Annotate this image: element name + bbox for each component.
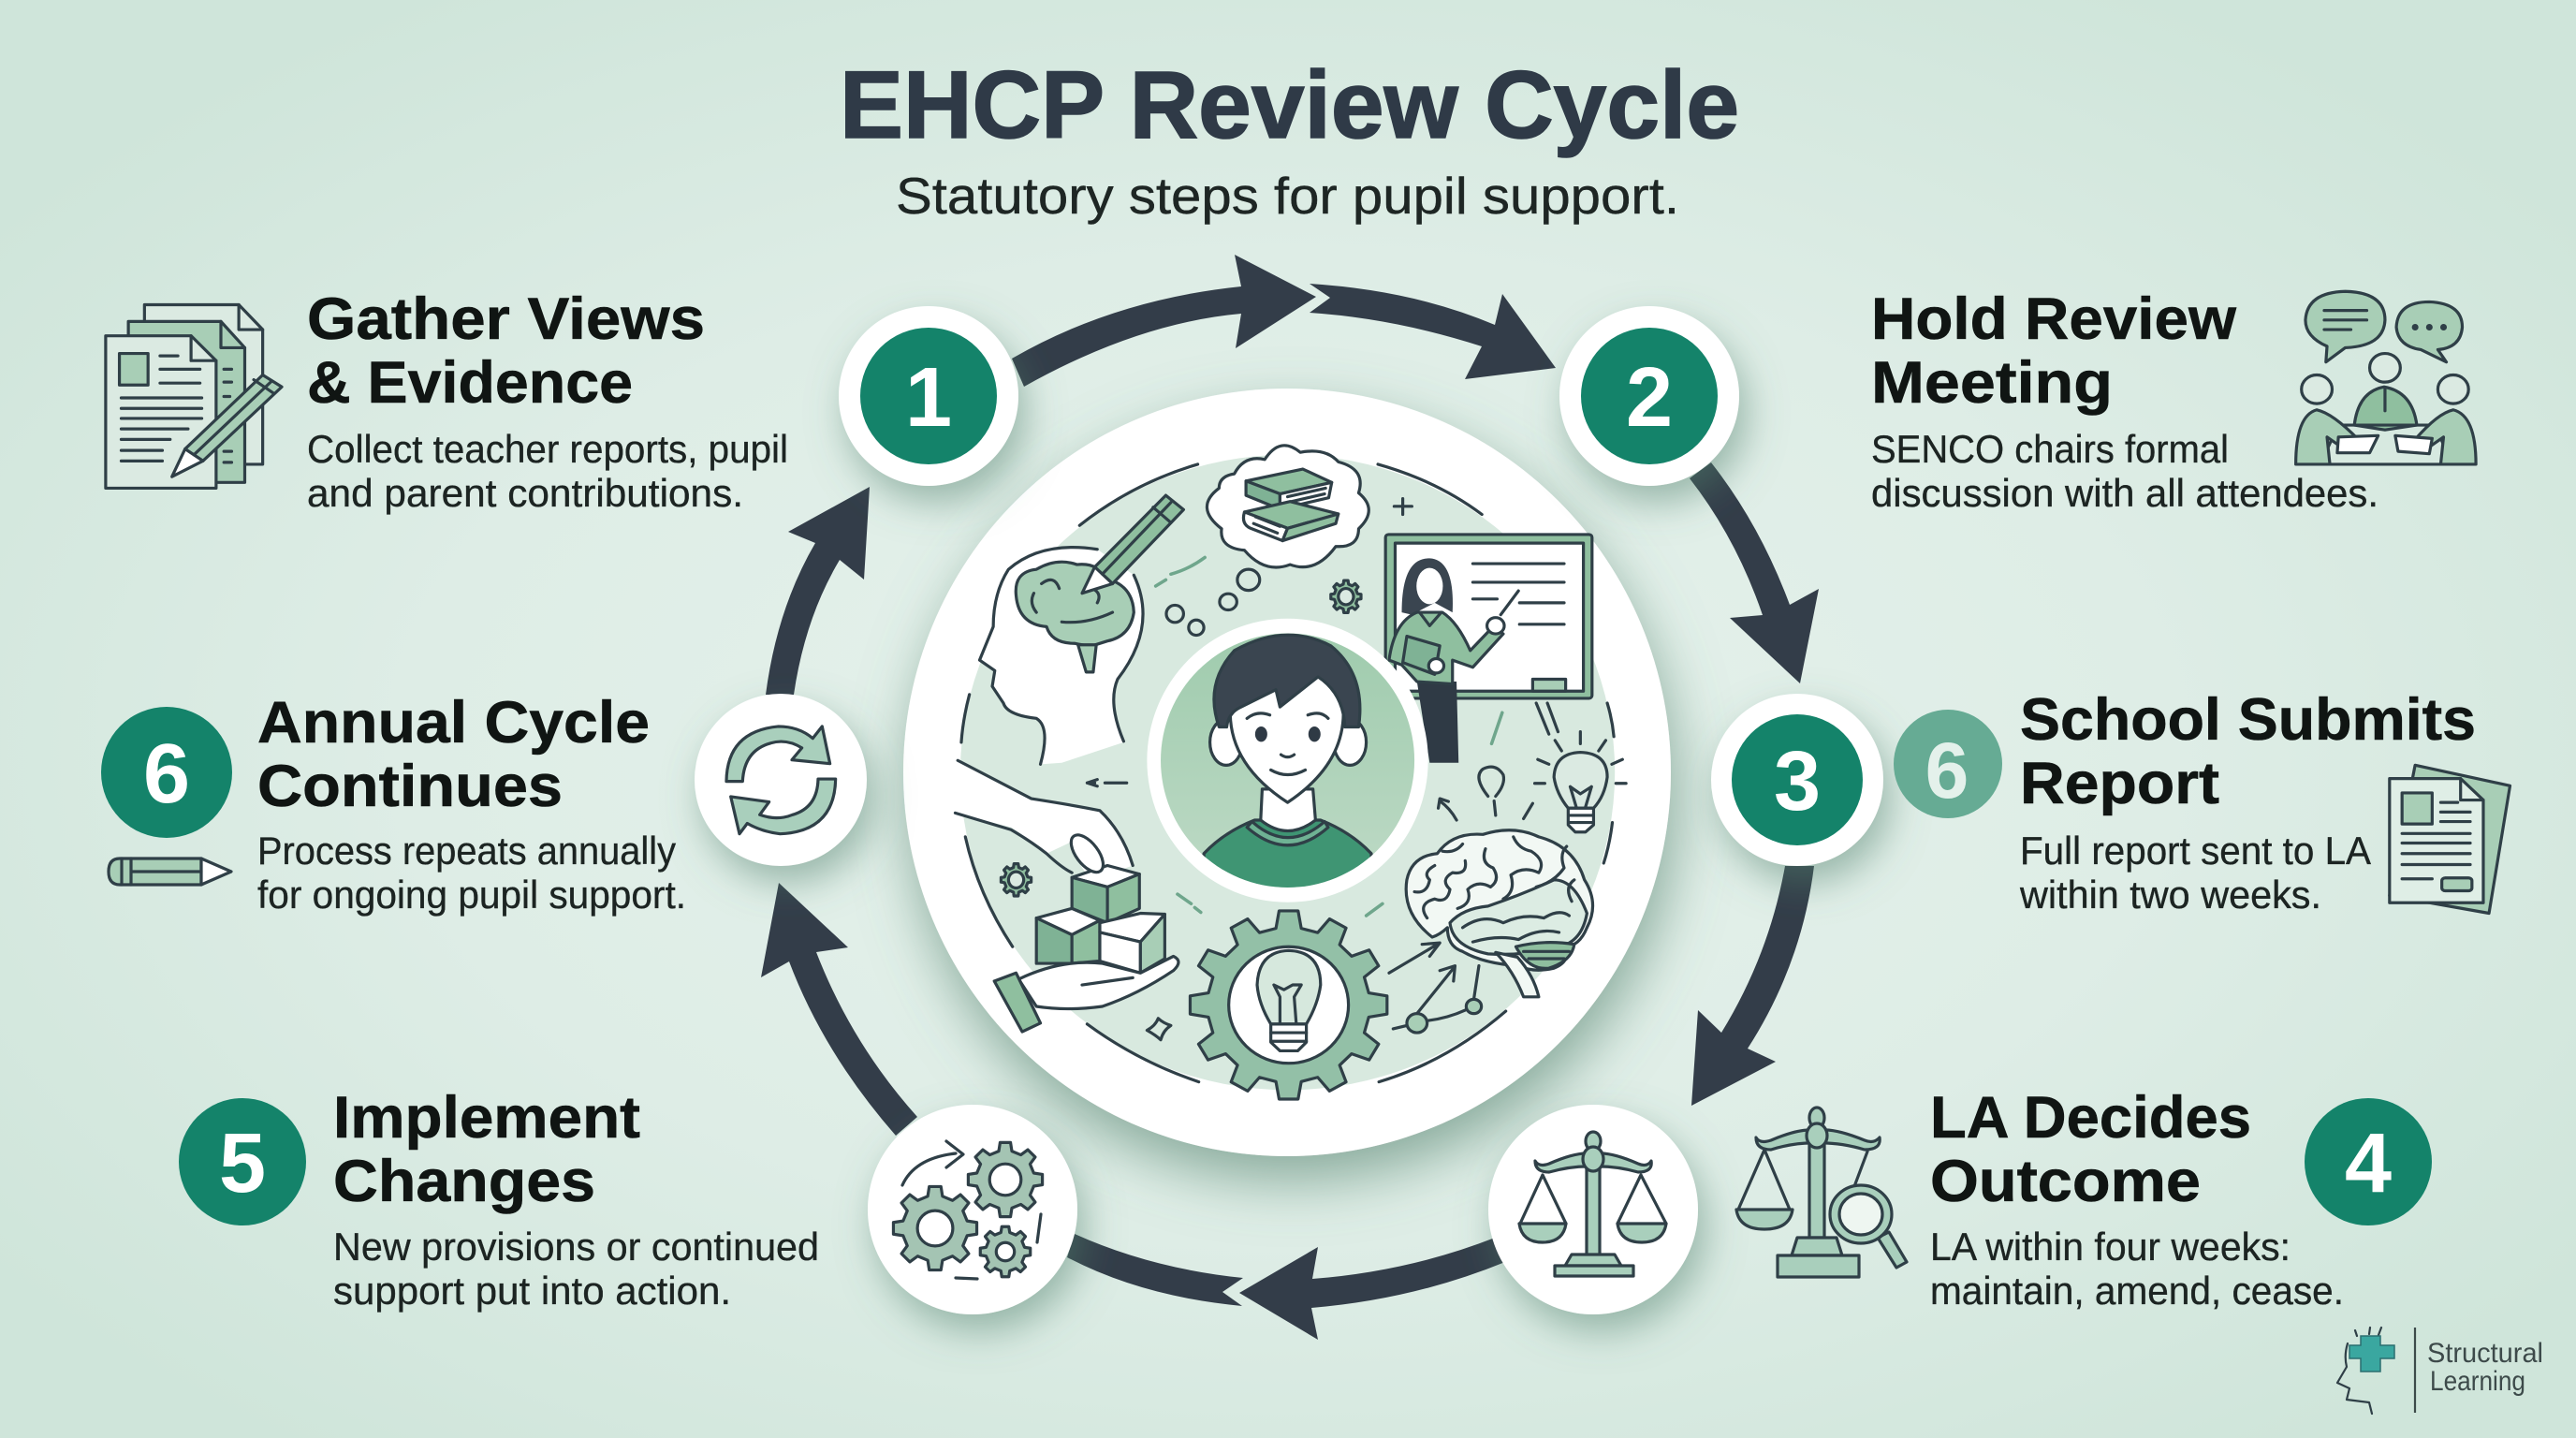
text block: hold review meeting: SENCO chairs formal <box>1871 427 2229 471</box>
node: three gears <box>868 1105 1077 1314</box>
node: refresh icon <box>695 694 867 866</box>
step 3 node <box>1711 694 1883 866</box>
text block: school submits report: School Submits <box>2020 687 2476 753</box>
anatomical brain <box>1406 830 1593 997</box>
central illustration panel <box>903 389 1671 1156</box>
badge: 6 <box>101 707 232 838</box>
text block: gather views and evidence: Gather Views <box>307 286 705 352</box>
hand placing block <box>955 760 1133 880</box>
arrow: step 6 to step 1 <box>766 487 870 695</box>
icon: report <box>2390 765 2510 914</box>
logo divider and wordmark: Structural <box>2427 1338 2543 1369</box>
logo divider and wordmark <box>2415 1328 2543 1413</box>
text block: hold review meeting: Hold Review <box>1871 286 2237 352</box>
thought bubbles <box>1166 569 1260 636</box>
arrow: step 1 to midpoint top <box>1012 255 1316 387</box>
logo divider and wordmark: Learning <box>2430 1366 2525 1397</box>
text block: school submits report: Full report sent to LA <box>2020 829 2371 873</box>
text block: LA decides outcome <box>1930 1085 2344 1313</box>
plus mark <box>1394 499 1412 514</box>
step 3 node: 3 <box>1774 735 1821 829</box>
step 1 node <box>839 306 1018 486</box>
arrow: step 3 to step 4 <box>1691 866 1814 1106</box>
text block: LA decides outcome: Outcome <box>1930 1149 2201 1214</box>
step 2 node: 2 <box>1626 351 1673 445</box>
step 1 node: 1 <box>905 351 952 445</box>
text block: school submits report: Report <box>2020 751 2219 816</box>
illustration scene <box>955 446 1626 1099</box>
step 2 node <box>1559 306 1739 486</box>
title: EHCP Review Cycle <box>840 51 1739 158</box>
head with brain and pencil <box>979 495 1183 764</box>
badge: 4: 4 <box>2345 1117 2392 1211</box>
inner tinted disc <box>960 455 1615 1090</box>
text block: implement changes <box>333 1085 819 1313</box>
text block: annual cycle continues: Annual Cycle <box>257 690 650 756</box>
badge: 5 <box>179 1098 306 1225</box>
teacher at whiteboard <box>1385 535 1592 763</box>
text block: hold review meeting: Meeting <box>1871 350 2113 416</box>
icon: scales and magnifier <box>1736 1108 1907 1277</box>
thought cloud with books <box>1207 446 1368 567</box>
dashed ring segments <box>961 464 1614 1082</box>
icon: meeting <box>2296 291 2476 464</box>
badge: faded 6 <box>1894 710 2002 818</box>
gear with light bulb <box>1190 911 1387 1099</box>
text block: LA decides outcome: LA Decides <box>1930 1085 2251 1151</box>
icon: small pencil <box>109 858 231 885</box>
badge: 6: 6 <box>143 727 190 821</box>
text block: annual cycle continues: Continues <box>257 754 563 819</box>
badge: faded 6: 6 <box>1925 726 1969 814</box>
logo head outline <box>2337 1328 2381 1414</box>
logo: Structural Learning <box>2337 1328 2543 1414</box>
text block: gather views and evidence: Collect teacher reports, pupil <box>307 427 788 471</box>
text block: hold review meeting <box>1871 286 2378 515</box>
arrow: step 4 to bottom midpoint <box>1239 1238 1505 1340</box>
idea bulb <box>1439 732 1626 832</box>
pupil portrait <box>1147 619 1428 902</box>
arrow: step 2 to step 3 <box>1690 462 1819 683</box>
text block: school submits report <box>2019 687 2476 917</box>
text block: annual cycle continues <box>257 690 686 917</box>
white disc <box>903 389 1671 1156</box>
small gear left <box>1001 864 1032 896</box>
network nodes <box>1389 943 1482 1033</box>
text block: LA decides outcome: maintain, amend, cease. <box>1930 1269 2344 1313</box>
node: balance scales <box>1488 1105 1698 1314</box>
text block: implement changes: New provisions or continued <box>333 1225 819 1269</box>
cycle arrows <box>761 255 1819 1340</box>
sparkle and small arrow <box>1087 780 1171 1040</box>
text block: annual cycle continues: for ongoing pupil support. <box>257 873 686 917</box>
stacked blocks <box>1036 829 1164 973</box>
small gear top <box>1331 580 1361 612</box>
badge: 5: 5 <box>219 1117 266 1211</box>
green dashes <box>1156 557 1502 916</box>
text block: implement changes: Implement <box>333 1085 640 1151</box>
text block: gather views and evidence: & Evidence <box>307 350 633 416</box>
text block: annual cycle continues: Process repeats annually <box>257 829 676 873</box>
arrow: bottom midpoint to step 5 <box>1067 1234 1243 1306</box>
icon: documents and pencil <box>106 305 282 488</box>
text block: school submits report: within two weeks. <box>2019 873 2321 917</box>
arrow: step 5 to step 6 <box>761 883 917 1136</box>
logo cross <box>2349 1336 2394 1372</box>
text block: gather views and evidence <box>307 286 788 515</box>
badge: 4 <box>2305 1098 2432 1225</box>
subtitle: Statutory steps for pupil support. <box>896 167 1679 225</box>
text block: gather views and evidence: and parent contributions. <box>307 471 743 515</box>
text block: hold review meeting: discussion with all attendees. <box>1871 471 2378 515</box>
text block: implement changes: support put into action. <box>333 1269 731 1313</box>
receiving hand <box>994 956 1178 1032</box>
arrow: top midpoint to step 2 <box>1310 284 1556 379</box>
text block: LA decides outcome: LA within four weeks: <box>1930 1225 2291 1269</box>
text block: implement changes: Changes <box>333 1149 595 1214</box>
